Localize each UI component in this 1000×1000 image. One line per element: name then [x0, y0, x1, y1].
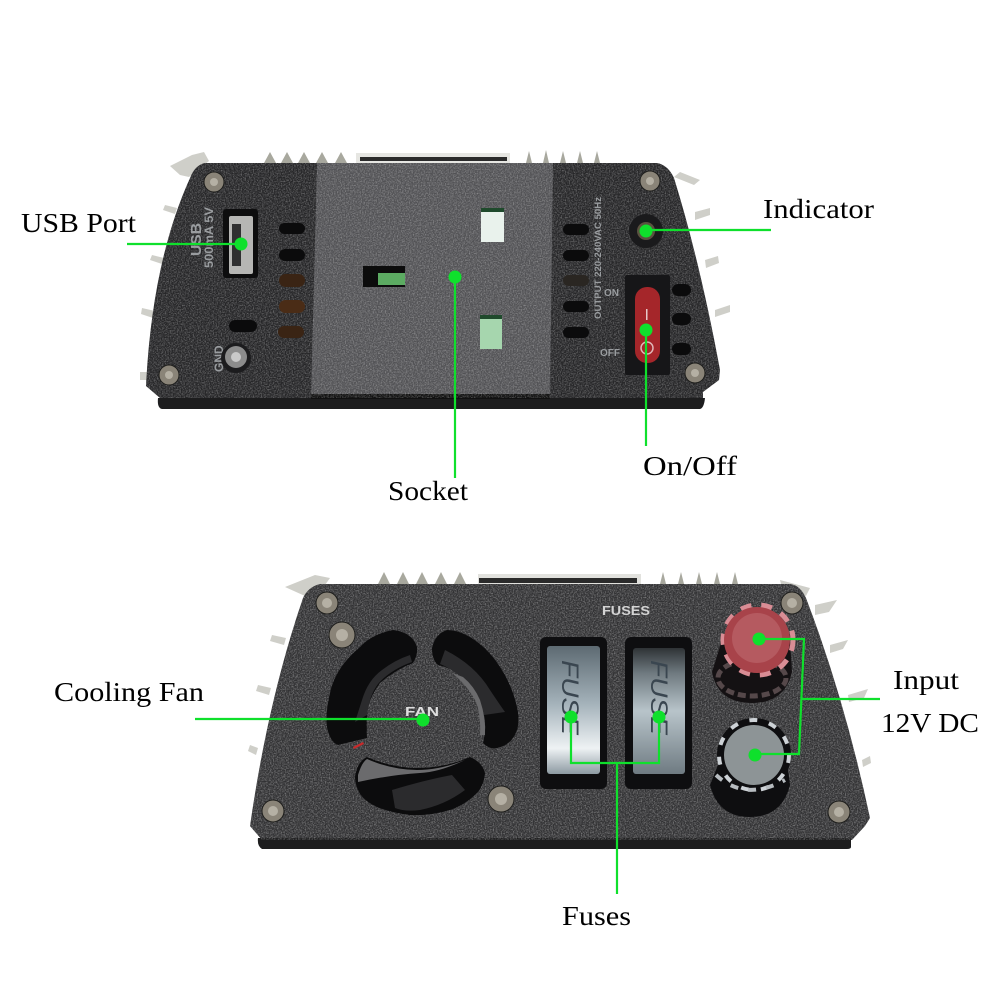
indicator lamp [629, 214, 663, 248]
callout: Input 12V DC [748, 632, 979, 762]
socket openings [363, 208, 504, 349]
heat sink fins, top [140, 150, 730, 380]
USB port [223, 209, 258, 278]
callout: Cooling Fan: Cooling Fan [54, 677, 205, 707]
callout: Fuses: Fuses [562, 901, 631, 931]
left vent slots [229, 223, 305, 338]
USB label: USB [188, 223, 205, 256]
rocker switch [625, 275, 670, 375]
casing texture [140, 160, 730, 400]
casing [146, 163, 720, 398]
fan vents [326, 630, 518, 815]
callout: USB Port [21, 208, 248, 250]
callout: USB Port: USB Port [21, 208, 137, 238]
callout: On/Off [640, 324, 737, 481]
fan label: FAN [405, 704, 439, 719]
casing texture [245, 580, 875, 845]
callout: Socket [388, 270, 469, 506]
bottom rail [158, 398, 705, 409]
callout: Indicator [640, 194, 874, 238]
USB label [188, 207, 216, 268]
screws [159, 171, 705, 385]
callout: Input 12V DC: 12V DC [881, 708, 979, 738]
red terminal [712, 605, 793, 703]
right vent slots [563, 224, 691, 355]
panel: front of inverter [140, 150, 730, 409]
socket plate [311, 163, 553, 398]
callout: Indicator: Indicator [763, 194, 874, 224]
black terminal [710, 718, 791, 817]
USB label: 500mA 5V [202, 207, 216, 268]
bottom rail [258, 838, 851, 849]
fuse covers: FUSE [556, 660, 583, 736]
callout: Fuses [562, 710, 666, 931]
heat sink fins, top [248, 572, 871, 767]
GND terminal [212, 343, 251, 373]
callout: On/Off: On/Off [643, 451, 737, 481]
on off labels: OFF [600, 348, 620, 359]
panel: back of inverter [245, 572, 875, 849]
GND terminal: GND [212, 345, 226, 372]
on off labels: ON [604, 288, 619, 299]
fuse covers [540, 637, 692, 789]
screws [262, 592, 850, 823]
casing [250, 584, 870, 840]
output label: OUTPUT 220-240VAC 50Hz [593, 197, 604, 319]
on off labels [600, 288, 620, 359]
fuse covers: FUSE [645, 660, 672, 736]
callout: Input 12V DC: Input [893, 665, 960, 695]
fuses label: FUSES [602, 603, 650, 618]
callout: Cooling Fan [54, 677, 430, 726]
callout: Socket: Socket [388, 476, 469, 506]
